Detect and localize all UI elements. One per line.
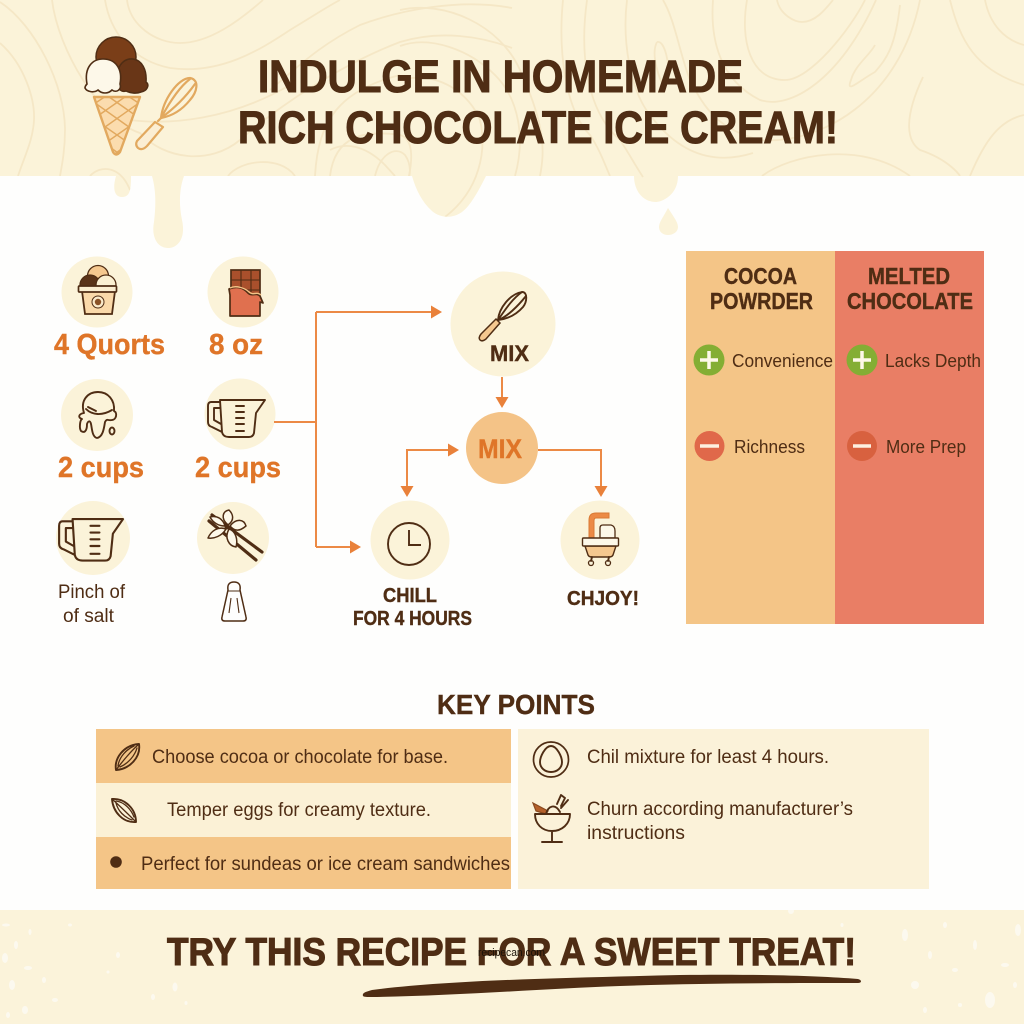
ingredient: ice cream tub: 4 Quorts [54, 329, 165, 361]
icon: cocoa bean [116, 744, 139, 770]
panel: key points right: Churn according manufacturer’s [587, 799, 853, 820]
arrow: whisk to mix [496, 377, 508, 408]
column: melted chocolate: MELTED [868, 263, 950, 289]
ingredient: melted ice cream [58, 379, 144, 484]
flow: chill step: CHILL [383, 585, 437, 607]
icon: bullet [110, 856, 122, 868]
ingredient: melted ice cream: 2 cups [58, 452, 144, 484]
header band with melting drips [0, 0, 1024, 248]
flow: mix node [466, 412, 538, 484]
panel: key points left: Temper eggs for creamy texture. [167, 800, 431, 821]
panel: key points right: Chil mixture for least 4 hours. [587, 747, 829, 768]
ingredient: measuring cup: 2 cups [195, 452, 281, 484]
icon: sundae [533, 795, 570, 842]
arrow: ingredients connector [274, 306, 442, 554]
ingredient: cocoa cup: of salt [63, 606, 115, 627]
flow: mix step with whisk [450, 272, 556, 376]
ingredient: ice cream tub [54, 256, 165, 361]
flow: enjoy step [560, 500, 640, 610]
panel: key points right: instructions [587, 823, 685, 844]
panel: key points left: Perfect for sundeas or ice cream sandwiches [141, 854, 510, 875]
column: cocoa powder: POWRDER [710, 288, 813, 314]
flow: chill step [353, 500, 472, 630]
flow: enjoy step: CHJOY! [567, 588, 639, 610]
icon: ice cream cone [84, 37, 150, 156]
panel: key points right [518, 729, 929, 889]
flow: mix step with whisk: MIX [490, 341, 529, 366]
column: cocoa powder [686, 251, 835, 624]
column: melted chocolate [835, 251, 984, 624]
icon: almond [112, 799, 136, 822]
ingredient: vanilla [197, 502, 269, 574]
flow: mix node: MIX [478, 434, 522, 464]
icon: salt shaker [222, 582, 246, 621]
arrow: mix to chill [400, 444, 459, 497]
heading: key points: KEY POINTS [437, 689, 595, 720]
title: RICH CHOCOLATE ICE CREAM! [238, 102, 838, 153]
title [238, 51, 838, 153]
panel: key points left: Choose cocoa or chocolate for base. [152, 747, 448, 768]
panel: key points left [96, 729, 511, 889]
column: melted chocolate: CHOCOLATE [847, 288, 973, 314]
arrow: mix to enjoy [538, 450, 608, 497]
panel: ingredients [54, 256, 281, 627]
icon: egg [534, 742, 568, 777]
column: melted chocolate: More Prep [886, 437, 966, 457]
column: cocoa powder: Richness [734, 437, 805, 457]
column: melted chocolate: Lacks Depth [885, 351, 981, 371]
call to action: TRY THIS RECIPE FOR A SWEET TREAT! [167, 931, 856, 974]
icon: whisk [136, 78, 196, 149]
title: INDULGE IN HOMEMADE [258, 51, 743, 102]
ingredient: chocolate bar: 8 oz [209, 329, 263, 361]
brush underline [363, 975, 861, 997]
panel: comparison [686, 251, 984, 624]
flow: chill step: FOR 4 HOURS [353, 608, 472, 630]
column: cocoa powder: COCOA [724, 263, 797, 289]
footer texture specks [2, 908, 1021, 1018]
watermark: recipecan.com [478, 947, 545, 959]
ingredient: cocoa cup: Pinch of [58, 582, 126, 603]
ingredient: measuring cup [195, 378, 281, 484]
ingredient: cocoa cup [56, 501, 130, 627]
column: cocoa powder: Convenience [732, 351, 833, 371]
footer banner [0, 908, 1024, 1024]
ingredient: chocolate bar [208, 256, 278, 361]
